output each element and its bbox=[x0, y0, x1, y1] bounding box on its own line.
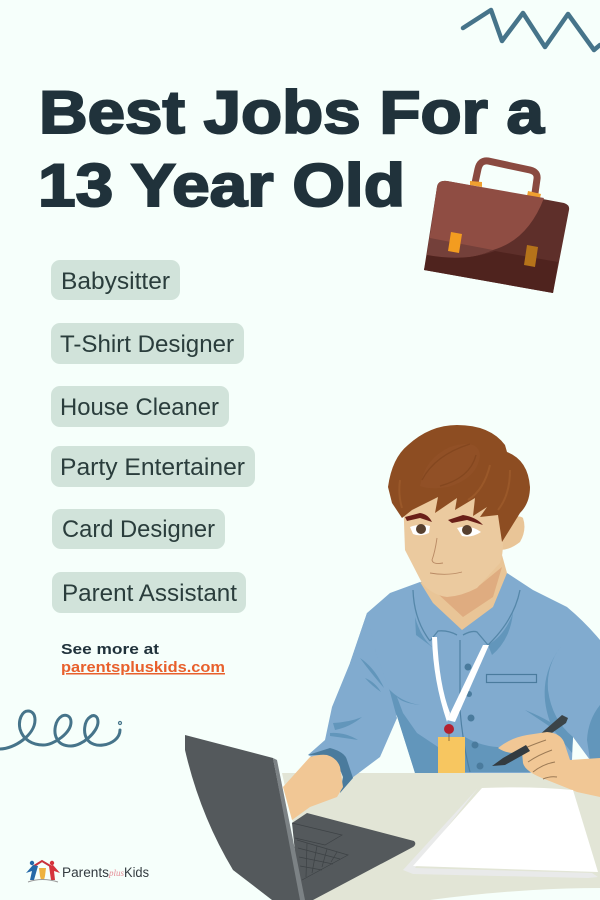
list of jobs bbox=[51, 260, 255, 613]
job: Party Entertainer bbox=[51, 446, 255, 487]
left sleeve bbox=[308, 613, 397, 778]
title line 1: Best Jobs For a bbox=[39, 79, 545, 146]
logo text: Parents bbox=[62, 865, 109, 880]
job: House Cleaner: House Cleaner bbox=[60, 394, 219, 421]
left cuff bbox=[308, 748, 353, 793]
laptop screen back bbox=[185, 735, 301, 900]
left forearm bbox=[283, 755, 343, 820]
logo text end: Kids bbox=[124, 865, 149, 880]
laptop bbox=[185, 735, 415, 900]
job: Card Designer: Card Designer bbox=[62, 516, 215, 543]
neck shadow bbox=[438, 567, 502, 617]
title line 2: 13 Year Old bbox=[38, 152, 405, 219]
placket line and buttons bbox=[460, 640, 484, 772]
pen lower part bbox=[492, 745, 530, 766]
laptop screen edge bbox=[273, 758, 305, 900]
eyebrows bbox=[405, 513, 483, 525]
job: Parent Assistant: Parent Assistant bbox=[62, 580, 237, 607]
lanyard and badge bbox=[432, 637, 489, 773]
collar edge lines bbox=[413, 590, 520, 645]
table bbox=[282, 773, 600, 900]
job: T-Shirt Designer: T-Shirt Designer bbox=[60, 331, 234, 358]
see more call to action bbox=[61, 641, 225, 676]
decorative zigzag line bbox=[463, 10, 600, 50]
neck bbox=[420, 555, 507, 630]
see more label: See more at bbox=[61, 641, 159, 658]
illustration: young man at laptop bbox=[185, 425, 600, 900]
hair bbox=[388, 425, 530, 542]
pen upper part bbox=[538, 715, 568, 740]
job: Babysitter: Babysitter bbox=[61, 268, 170, 295]
laptop base bbox=[292, 813, 415, 900]
white gap near right arm bbox=[572, 737, 590, 760]
face bbox=[403, 490, 503, 597]
logo icon bbox=[26, 861, 60, 882]
logo: Parents plus Kids bbox=[26, 861, 149, 882]
right hand bbox=[498, 732, 600, 797]
nose and mouth bbox=[430, 538, 462, 574]
logo script: plus bbox=[108, 868, 124, 878]
shirt body bbox=[350, 573, 600, 773]
job: Party Entertainer: Party Entertainer bbox=[60, 454, 245, 481]
laptop keyboard and trackpad bbox=[292, 823, 348, 880]
job: House Cleaner bbox=[51, 386, 229, 427]
shirt pocket bbox=[486, 674, 536, 682]
head bbox=[388, 425, 530, 597]
job: Babysitter bbox=[51, 260, 180, 300]
badge clip bbox=[444, 724, 454, 734]
job: T-Shirt Designer bbox=[51, 323, 244, 364]
decorative spiral line bbox=[0, 711, 121, 749]
title bbox=[38, 79, 545, 219]
job: Card Designer bbox=[52, 509, 225, 549]
job: Parent Assistant bbox=[52, 572, 246, 613]
badge bbox=[438, 737, 465, 773]
shirt shadows bbox=[375, 613, 600, 773]
eyes bbox=[410, 525, 430, 535]
paper bbox=[403, 787, 598, 878]
website link: parentspluskids.com bbox=[61, 659, 225, 676]
icon: briefcase bbox=[424, 161, 569, 293]
ear bbox=[500, 516, 524, 550]
